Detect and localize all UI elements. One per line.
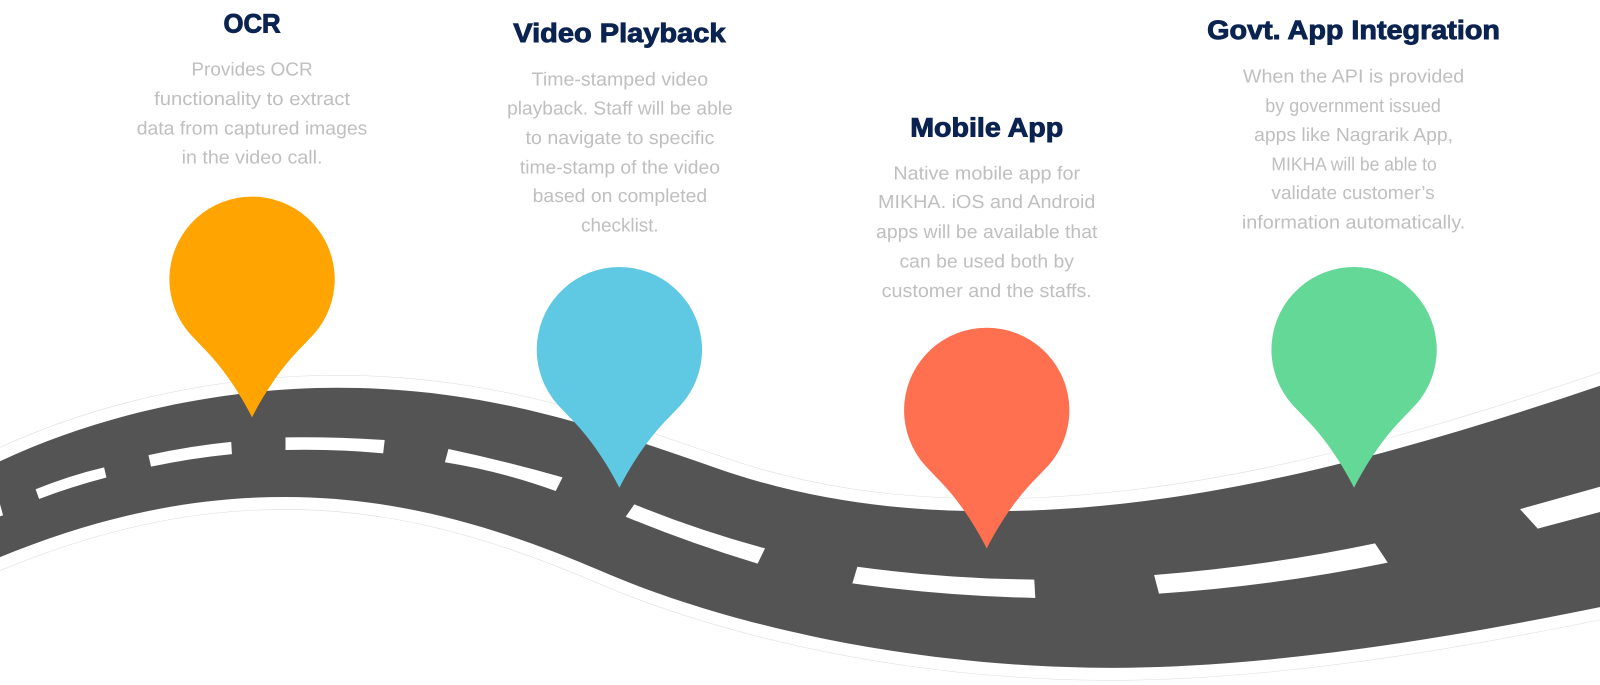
text block: OCR description: functionality to extract (154, 88, 350, 109)
text block: Video Playback description: checklist. (581, 214, 659, 236)
text block: Govt. App Integration description: MIKHA will be able to (1271, 153, 1437, 174)
text block: Mobile App description: customer and the staffs. (882, 280, 1092, 301)
text block: Video Playback description: playback. Staff will be able (507, 97, 733, 118)
heading: Mobile App: Mobile App (910, 112, 1063, 143)
text block: Video Playback description: based on completed (533, 185, 707, 206)
heading: Video Playback: Video Playback (513, 17, 726, 48)
text block: Mobile App description: can be used both by (899, 250, 1075, 271)
pin: Video Playback (blue) (537, 267, 702, 488)
text block: Govt. App Integration description: information automatically. (1242, 211, 1465, 233)
text block: Mobile App description: Native mobile app for (893, 162, 1080, 184)
text block: OCR description: in the video call. (182, 146, 322, 167)
heading: OCR: OCR (223, 8, 281, 39)
text block: OCR description (137, 58, 367, 167)
pin: Mobile App (coral) (904, 328, 1069, 548)
text block: Govt. App Integration description: validate customer’s (1271, 182, 1435, 203)
text block: Govt. App Integration description: When the API is provided (1243, 65, 1464, 87)
text block: Govt. App Integration description: apps like Nagrarik App, (1254, 123, 1453, 145)
text block: Video Playback description: time-stamp of the video (520, 156, 720, 178)
text block: Mobile App description (876, 162, 1097, 301)
pin: OCR (orange) (169, 197, 335, 417)
text block: Video Playback description: to navigate to specific (526, 127, 714, 148)
road (0, 365, 1600, 668)
text block: OCR description: data from captured images (137, 117, 367, 139)
text block: Govt. App Integration description (1242, 65, 1465, 233)
text block: Govt. App Integration description: by government issued (1265, 95, 1441, 116)
text block: OCR description: Provides OCR (191, 58, 313, 80)
lane dashes (0, 437, 1600, 598)
text block: Video Playback description: Time-stamped video (532, 68, 708, 90)
text block: Video Playback description (507, 68, 733, 236)
text block: Mobile App description: MIKHA. iOS and Android (878, 191, 1095, 212)
text block: Mobile App description: apps will be available that (876, 220, 1097, 242)
heading: Govt. App Integration: Govt. App Integration (1207, 14, 1500, 45)
pin: Govt. App Integration (green) (1271, 267, 1437, 488)
